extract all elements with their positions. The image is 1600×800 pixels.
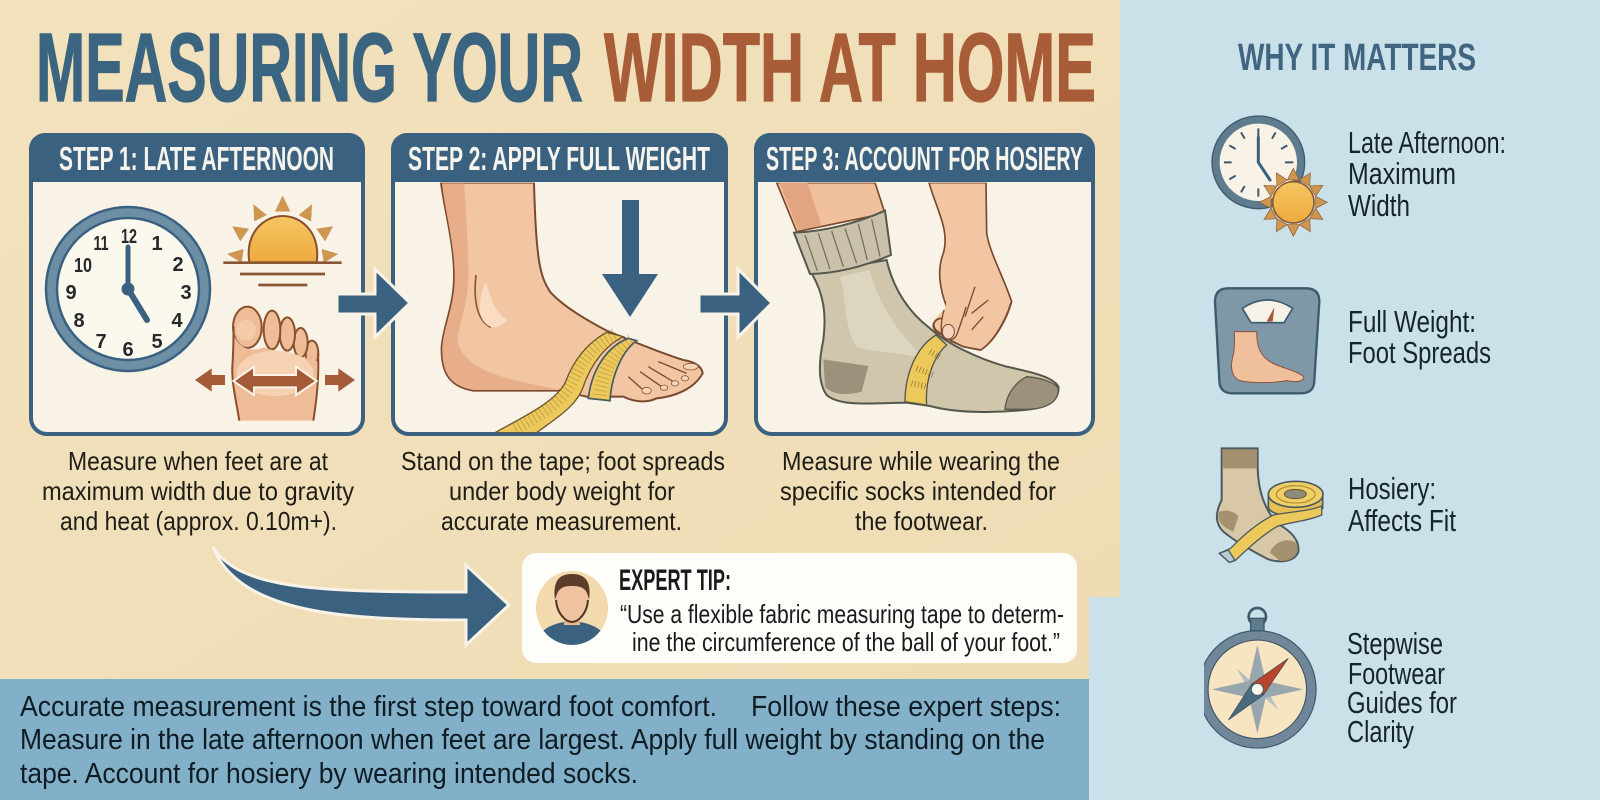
hand fingers and thumb [933,287,1011,350]
text: hosiery: Affects Fit [1348,503,1456,538]
icon: wall clock: 9 [65,282,77,304]
text: stepwise guides [1347,626,1457,749]
arrow: curved arrow to expert tip [213,547,509,645]
illustration: bare foot on tape [441,183,703,433]
icon: wall clock: 2 [172,254,184,276]
text: late afternoon: Maximum [1348,156,1456,191]
icon: wall clock: 1 [151,233,163,255]
arrow: step 2 to step 3 [699,269,772,337]
text: step 2 description: Stand on the tape; foot spreads [401,446,725,476]
text: step 2 description [401,446,725,536]
icon: wall clock: 12 [121,226,137,248]
bottom summary band: Accurate measurement is the first step toward foot comfort. [20,691,717,723]
tape measure [495,332,637,433]
icon: wall clock: 8 [73,310,85,332]
text: stepwise guides: Stepwise [1347,626,1443,661]
bottom summary band: tape. Account for hosiery by wearing intended socks. [20,758,638,790]
arrow: downward weight [602,200,658,317]
icon: wall clock [46,207,210,371]
icon: expert avatar [534,571,610,645]
heading: step 2: STEP 2: APPLY FULL WEIGHT [408,140,710,177]
heading: step 3: STEP 3: ACCOUNT FOR HOSIERY [766,140,1083,177]
icon: setting sun [223,196,342,285]
text: step 3 description: the footwear. [855,506,988,536]
illustration: sock with hand and tape [777,183,1059,412]
text: step 3 description: Measure while wearing the [782,446,1060,476]
heading: step 1: STEP 1: LATE AFTERNOON [59,140,334,177]
panel: step 3 account for hosiery [754,133,1095,434]
title: MEASURING YOUR [36,13,583,122]
icon: clock and sun [1212,116,1327,236]
text: late afternoon: Late Afternoon: [1348,125,1506,160]
text: hosiery: Hosiery: [1348,471,1436,506]
title: WIDTH AT HOME [604,13,1096,122]
icon: compass [1199,608,1316,748]
panel: step 1 late afternoon [29,133,365,434]
heading: why it matters: WHY IT MATTERS [1238,37,1476,79]
bottom summary band: Measure in the late afternoon when feet are largest. Apply full weight by standing on the [20,724,1045,756]
tip quote: ine the circumference of the ball of your foot.” [632,627,1060,657]
text: full weight [1348,304,1491,370]
text: step 3 description: specific socks intended for [780,476,1056,506]
text: step 1 description: maximum width due to gravity [42,476,354,506]
text: step 2 description: accurate measurement. [441,506,682,536]
icon: sock and tape measure [1217,448,1323,562]
text: hosiery [1348,471,1456,538]
text: stepwise guides: Guides for [1347,685,1457,720]
icon: foot on weighing scale [1215,288,1319,393]
icon: foot with width arrows [195,307,355,421]
icon: wall clock: 3 [180,282,192,304]
tip heading: EXPERT TIP: [619,564,731,597]
panel: step 2 apply full weight [391,133,728,434]
text: late afternoon: Width [1348,188,1410,223]
text: full weight: Full Weight: [1348,304,1476,339]
icon: wall clock: 4 [171,310,183,332]
text: stepwise guides: Footwear [1348,656,1445,691]
icon: wall clock: 6 [122,339,134,361]
bottom summary band: Follow these expert steps: [751,691,1061,723]
bottom summary band [0,679,1089,800]
text: full weight: Foot Spreads [1348,335,1491,370]
text: step 1 description [42,446,354,536]
text: late afternoon [1348,125,1506,223]
tip quote [620,599,1064,657]
beige main background [0,0,1120,680]
text: step 2 description: under body weight for [449,476,675,506]
text: step 1 description: Measure when feet are at [68,446,329,476]
arrow: step 1 to step 2 [337,269,410,337]
callout: expert tip [522,553,1077,663]
text: step 1 description: and heat (approx. 0.10m+). [60,506,337,536]
text: stepwise guides: Clarity [1347,714,1414,749]
text: step 3 description [780,446,1060,536]
icon: wall clock: 5 [151,331,163,353]
icon: wall clock: 7 [95,331,107,353]
icon: wall clock: 10 [74,255,92,277]
icon: wall clock: 11 [94,233,108,255]
tip quote: “Use a flexible fabric measuring tape to determ- [620,599,1064,629]
